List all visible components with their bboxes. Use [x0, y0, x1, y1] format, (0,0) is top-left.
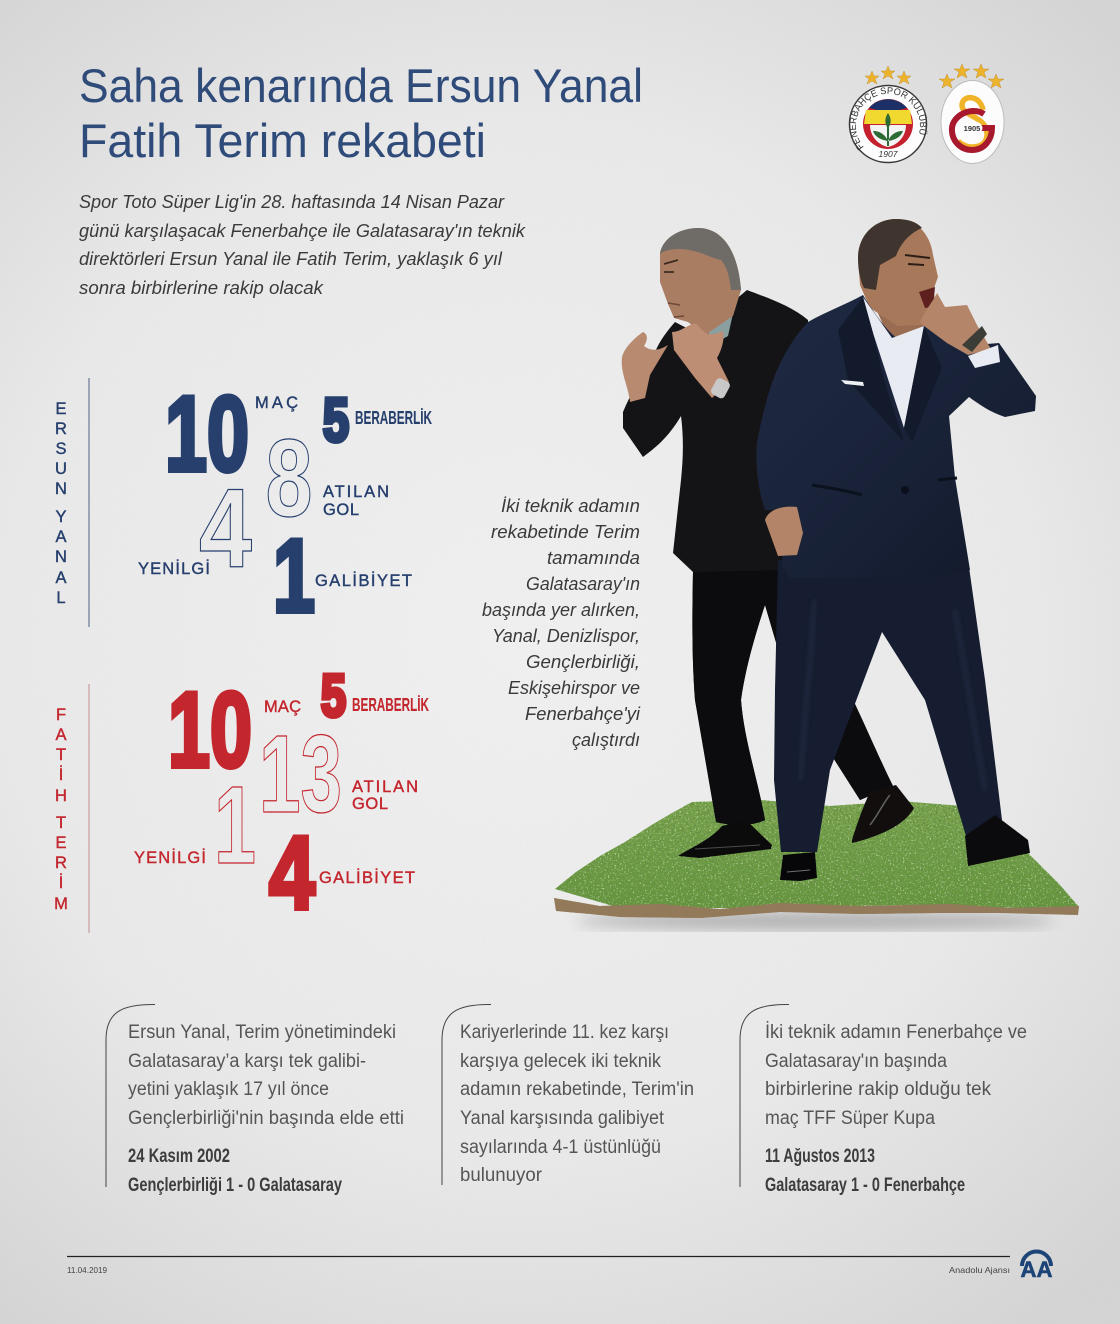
text block: Super Cup: [740, 1004, 1027, 1196]
side text: İki teknik adamın: [501, 495, 640, 516]
text block: rivalry record: Yanal karşısında galibiyet: [460, 1108, 665, 1129]
stat: 5 beraberlik: BERABERLİK: [352, 695, 429, 715]
Ersun Yanal: [622, 228, 914, 858]
vertical name: Fatih Terim: M: [54, 895, 68, 913]
vertical name: Fatih Terim: A: [55, 726, 67, 744]
stat: 10 maç: MAÇ: [264, 698, 301, 716]
stat: 13 atılan gol: GOL: [352, 795, 388, 813]
stat: 5 beraberlik: [321, 663, 429, 729]
text block: rivalry record: bulunuyor: [460, 1165, 543, 1186]
text block: Super Cup: Galatasaray'ın başında: [765, 1051, 947, 1072]
vertical name: Fatih Terim: E: [55, 834, 67, 852]
vertical name: Fatih Terim: H: [55, 787, 67, 805]
side text: tamamında: [547, 547, 640, 568]
stats: Ersun Yanal: [55, 374, 432, 634]
stat: 5 beraberlik: [323, 386, 432, 454]
text block: 2002 result: Ersun Yanal, Terim yönetimindeki: [128, 1022, 396, 1043]
grass pitch: [554, 800, 1079, 918]
side text: [482, 495, 641, 750]
pitch shadow: [575, 912, 1055, 930]
side text: Yanal, Denizlispor,: [492, 625, 640, 646]
icon: Fenerbahçe crest: 1907: [879, 149, 898, 159]
side text: Galatasaray'ın: [526, 573, 640, 594]
text block: 2002 result: Gençlerbirliği 1 - 0 Galatasaray: [128, 1175, 342, 1196]
icon: Galatasaray crest: [939, 64, 1004, 164]
stat: 8 atılan gol: ATILAN: [323, 483, 389, 501]
stat: 10 maç: 10: [165, 374, 249, 494]
vertical name: Ersun Yanal: U: [55, 460, 67, 478]
icon: Galatasaray crest: 1905: [964, 124, 980, 133]
stat: 4 yenilgi: [138, 466, 252, 591]
vertical name: Fatih Terim: R: [55, 854, 67, 872]
intro text: Spor Toto Süper Lig'in 28. haftasında 14 Nisan Pazar: [79, 191, 505, 212]
text block: rivalry record: Kariyerlerinde 11. kez karşı: [460, 1022, 669, 1043]
vertical name: Fatih Terim: İ: [59, 765, 63, 784]
stat: 4 galibiyet: GALİBİYET: [319, 868, 415, 887]
stat: 5 beraberlik: BERABERLİK: [355, 408, 432, 428]
side text: Eskişehirspor ve: [508, 677, 640, 698]
text block: 2002 result: yetini yaklaşık 17 yıl önce: [128, 1079, 329, 1100]
vertical name: Ersun Yanal: A: [55, 569, 67, 587]
stat: 5 beraberlik: 5: [323, 386, 349, 454]
icon: Fenerbahçe crest: [848, 66, 928, 164]
stat: 1 yenilgi: [134, 764, 256, 887]
vertical name: Ersun Yanal: L: [56, 589, 66, 607]
vertical name: Fatih Terim: İ: [59, 873, 63, 892]
stat: 4 galibiyet: 4: [269, 816, 315, 932]
stat: 13 atılan gol: ATILAN: [352, 778, 418, 796]
text block: Super Cup: birbirlerine rakip olduğu tek: [765, 1079, 991, 1100]
icon: Fenerbahçe crest: FENERBAHÇE SPOR KULÜBÜ: [850, 87, 928, 150]
stat: 8 atılan gol: 8: [266, 417, 312, 540]
stat: 1 yenilgi: 1: [214, 764, 256, 887]
intro text: [79, 191, 527, 298]
vertical name: Ersun Yanal: [55, 400, 67, 607]
footer: Anadolu Ajansı: [949, 1265, 1010, 1275]
side text: Gençlerbirliği,: [526, 651, 640, 672]
text block: rivalry record: sayılarında 4-1 üstünlüğü: [460, 1137, 661, 1158]
stat: 1 galibiyet: [273, 518, 412, 634]
stat: 4 galibiyet: [269, 816, 415, 932]
stat: 13 atılan gol: 13: [259, 713, 342, 836]
vertical name: Ersun Yanal: N: [55, 548, 67, 566]
vertical name: Fatih Terim: [54, 706, 68, 913]
stat: 4 yenilgi: 4: [199, 466, 252, 591]
text block: rivalry record: karşıya gelecek iki teknik: [460, 1051, 661, 1072]
footer: 11.04.2019: [67, 1265, 107, 1275]
stat: 4 yenilgi: YENİLGİ: [138, 559, 210, 578]
side text: başında yer alırken,: [482, 599, 640, 620]
vertical name: Fatih Terim: F: [56, 706, 66, 724]
side text: Fenerbahçe'yi: [525, 703, 641, 724]
text block: rivalry record: [442, 1004, 694, 1186]
intro text: günü karşılaşacak Fenerbahçe ile Galatasaray'ın teknik: [79, 220, 527, 241]
intro text: sonra birbirlerine rakip olacak: [79, 277, 325, 298]
text block: 2002 result: Galatasaray’a karşı tek galibi-: [128, 1051, 366, 1072]
stat: 1 galibiyet: GALİBİYET: [315, 571, 412, 590]
icon: AA logo: AA: [1020, 1257, 1053, 1282]
vertical name: Ersun Yanal: R: [55, 420, 67, 438]
title: Saha kenarında Ersun Yanal: [79, 59, 643, 112]
text block: 2002 result: Gençlerbirliği'nin başında elde etti: [128, 1108, 404, 1129]
vertical name: Ersun Yanal: Y: [55, 508, 67, 526]
stat: 10 maç: MAÇ: [255, 394, 298, 412]
stats: Fatih Terim: [54, 663, 429, 933]
stat: 8 atılan gol: [266, 417, 389, 540]
footer: [67, 1252, 1053, 1282]
text block: Super Cup: maç TFF Süper Kupa: [765, 1108, 935, 1129]
vertical name: Ersun Yanal: A: [55, 528, 67, 546]
intro text: direktörleri Ersun Yanal ile Fatih Terim, yaklaşık 6 yıl: [79, 248, 503, 269]
stat: 8 atılan gol: GOL: [323, 501, 359, 519]
title: [79, 59, 643, 167]
Fatih Terim: [756, 219, 1036, 881]
text block: 2002 result: 24 Kasım 2002: [128, 1146, 230, 1167]
stat: 5 beraberlik: 5: [321, 663, 346, 729]
vertical name: Ersun Yanal: S: [55, 440, 67, 458]
text block: Super Cup: İki teknik adamın Fenerbahçe ve: [765, 1022, 1027, 1043]
side text: rekabetinde Terim: [491, 521, 640, 542]
photo: pitch and coaches: [554, 219, 1079, 930]
stat: 1 galibiyet: 1: [273, 518, 315, 634]
title: Fatih Terim rekabeti: [79, 114, 486, 167]
text block: Super Cup: Galatasaray 1 - 0 Fenerbahçe: [765, 1175, 965, 1196]
text block: Super Cup: 11 Ağustos 2013: [765, 1146, 875, 1167]
text block: rivalry record: adamın rekabetinde, Terim'in: [460, 1079, 694, 1100]
vertical name: Ersun Yanal: N: [55, 480, 67, 498]
text block: 2002 result: [106, 1004, 404, 1196]
vertical name: Fatih Terim: T: [56, 814, 66, 832]
stat: 10 maç: 10: [168, 670, 252, 790]
stat: 1 yenilgi: YENİLGİ: [134, 848, 206, 867]
side text: çalıştırdı: [572, 729, 640, 750]
vertical name: Fatih Terim: T: [56, 746, 66, 764]
vertical name: Ersun Yanal: E: [55, 400, 67, 418]
